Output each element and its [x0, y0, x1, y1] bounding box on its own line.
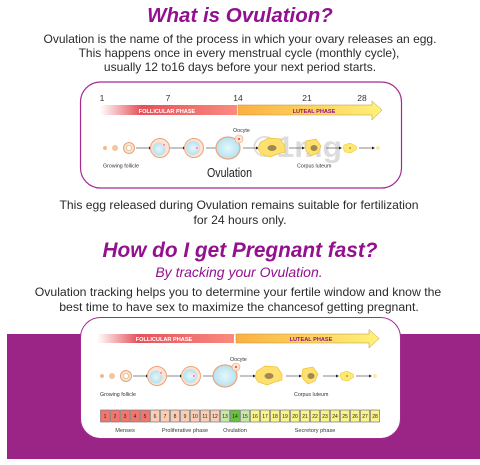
- day numbers: 7: [164, 414, 167, 420]
- day numbers: 11: [202, 414, 208, 420]
- tracking paragraph: [35, 285, 441, 314]
- title: What is Ovulation?: What is Ovulation?: [147, 4, 333, 27]
- follicle development sequence: [103, 135, 380, 159]
- intro paragraph: usually 12 to16 days before your next period starts.: [104, 60, 376, 74]
- day numbers: [100, 93, 367, 103]
- day numbers: 21: [302, 414, 308, 420]
- stage labels: Corpus luteum: [297, 164, 332, 170]
- day numbers: 21: [302, 93, 312, 103]
- day numbers: 1: [100, 93, 105, 103]
- phase arrow: [100, 101, 382, 120]
- phase arrow: FOLLICULAR PHASE: [139, 109, 196, 115]
- cycle phase labels: [115, 428, 335, 434]
- day numbers: 7: [166, 93, 171, 103]
- day numbers: 20: [292, 414, 298, 420]
- day cells 1-28: [100, 410, 380, 422]
- phase arrow: FOLLICULAR PHASE: [136, 337, 193, 343]
- day numbers: 6: [154, 414, 157, 420]
- intro paragraph: This happens once in every menstrual cycle (monthly cycle),: [79, 46, 399, 60]
- stage labels: [100, 357, 329, 398]
- day numbers: 14: [232, 414, 238, 420]
- stage labels: Growing follicle: [103, 164, 139, 170]
- cycle phase labels: Proliferative phase: [162, 428, 208, 434]
- day numbers: 17: [262, 414, 268, 420]
- day numbers: 3: [124, 414, 127, 420]
- day numbers: 28: [357, 93, 367, 103]
- day numbers: 10: [192, 414, 198, 420]
- day numbers: 27: [362, 414, 368, 420]
- day numbers: 22: [312, 414, 318, 420]
- cycle phase labels: Ovulation: [223, 428, 247, 434]
- day numbers: 16: [252, 414, 258, 420]
- day numbers: 12: [212, 414, 218, 420]
- intro paragraph: [44, 32, 436, 74]
- day numbers: 2: [114, 414, 117, 420]
- day numbers: 23: [322, 414, 328, 420]
- heading: How do I get Pregnant fast?: How do I get Pregnant fast?: [102, 239, 378, 262]
- day numbers: 4: [134, 414, 137, 420]
- day numbers: 9: [184, 414, 187, 420]
- day numbers: 8: [174, 414, 177, 420]
- day numbers: 14: [233, 93, 243, 103]
- egg viability text: [59, 198, 419, 227]
- panel: ovulation timeline: [80, 82, 402, 188]
- stage labels: Growing follicle: [100, 392, 136, 398]
- tracking paragraph: best time to have sex to maximize the chancesof getting pregnant.: [59, 300, 419, 314]
- day numbers: 26: [352, 414, 358, 420]
- tracking paragraph: Ovulation tracking helps you to determine your fertile window and know the: [35, 285, 441, 299]
- phase arrow: LUTEAL PHASE: [290, 337, 333, 343]
- day numbers: 19: [282, 414, 288, 420]
- follicle development sequence: [100, 363, 377, 387]
- egg viability text: This egg released during Ovulation remains suitable for fertilization: [59, 198, 419, 212]
- phase arrow: LUTEAL PHASE: [293, 109, 336, 115]
- day numbers: 24: [332, 414, 338, 420]
- day numbers: 18: [272, 414, 278, 420]
- cycle phase labels: Secretory phase: [295, 428, 335, 434]
- phase arrow: [97, 330, 379, 348]
- day numbers: 25: [342, 414, 348, 420]
- stage labels: Oocyte: [230, 357, 247, 363]
- day numbers: 5: [144, 414, 147, 420]
- stage labels: Oocyte: [233, 128, 250, 134]
- subheading: By tracking your Ovulation.: [155, 264, 323, 280]
- stage labels: Corpus luteum: [294, 392, 329, 398]
- panel: cycle calendar: [80, 318, 400, 438]
- purple background band: [7, 334, 480, 459]
- day numbers: 28: [372, 414, 378, 420]
- day numbers: [104, 414, 378, 420]
- stage labels: [103, 128, 332, 170]
- day numbers: 15: [242, 414, 248, 420]
- day numbers: 13: [222, 414, 228, 420]
- label: Ovulation: Ovulation: [207, 166, 252, 180]
- intro paragraph: Ovulation is the name of the process in which your ovary releases an egg.: [44, 32, 436, 46]
- egg viability text: for 24 hours only.: [194, 213, 286, 227]
- cycle phase labels: Menses: [115, 428, 135, 434]
- day numbers: 1: [104, 414, 107, 420]
- watermark: ©1mg: [253, 131, 342, 164]
